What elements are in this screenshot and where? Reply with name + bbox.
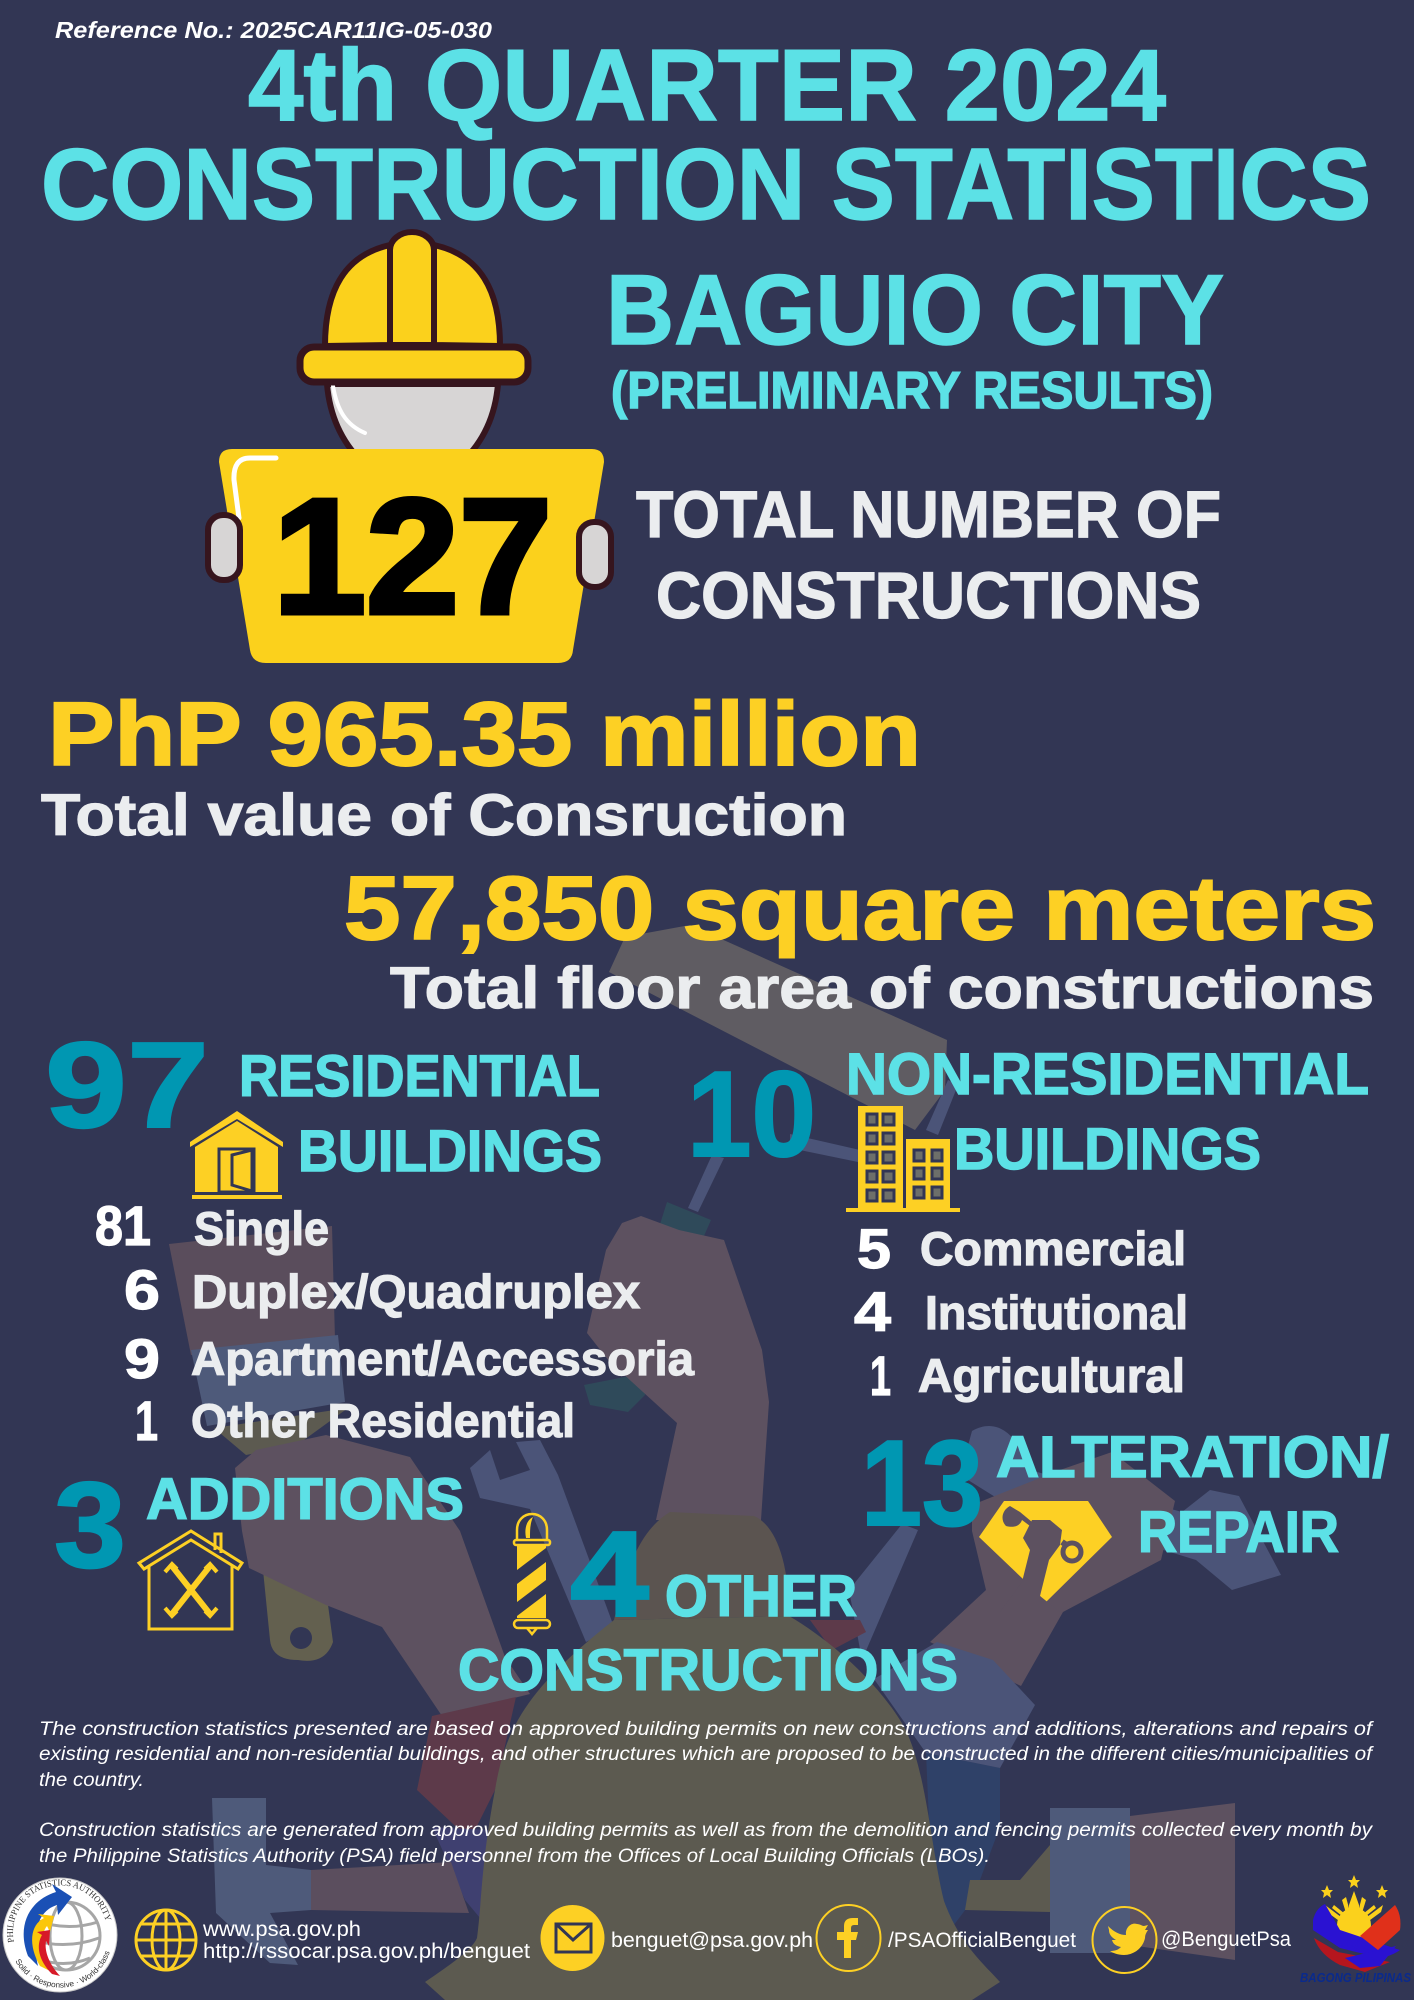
reference number: Reference No.: 2025CAR11IG-05-030 <box>55 17 492 43</box>
contact: email: benguet@psa.gov.ph <box>611 1929 813 1952</box>
list: residential breakdown: 6 <box>124 1258 160 1321</box>
list: residential breakdown: 1 <box>135 1389 158 1452</box>
panel: other constructions <box>458 1506 958 1703</box>
text block: methodology notes: existing residential and non-residential buildings, and other structures which are proposed to be constructed in the different cities/municipalities of <box>39 1744 1374 1765</box>
text block: methodology notes: the country. <box>39 1770 144 1791</box>
contact: websites <box>136 1910 530 1970</box>
text block: methodology notes: Construction statistics are generated from approved building permits as well as from the demolition and fencing permits collected every month by <box>39 1820 1374 1841</box>
title: 4th QUARTER 2024 <box>248 30 1166 142</box>
list: non-residential breakdown: Agricultural <box>918 1349 1185 1402</box>
panel: residential buildings: BUILDINGS <box>298 1119 602 1184</box>
icon: house <box>190 1111 283 1199</box>
panel: residential buildings <box>45 1017 695 1452</box>
heading: Baguio City <box>606 254 1224 420</box>
contact: websites: http://rssocar.psa.gov.ph/benguet <box>203 1940 530 1963</box>
stat label: total number of constructions <box>636 477 1221 632</box>
contact: twitter <box>1092 1907 1291 1973</box>
icon: house with crossed wrenches <box>139 1531 242 1629</box>
text block: methodology notes <box>39 1719 1374 1867</box>
icon: worker with helmet holding sign: 127 <box>273 465 552 648</box>
text block: methodology notes: The construction statistics presented are based on approved building permits on new constructions and additions, alterations and repairs of <box>39 1719 1374 1740</box>
stat: floor area: Total floor area of constructions <box>390 956 1374 1021</box>
list: residential breakdown: Duplex/Quadruplex <box>192 1265 640 1318</box>
text block: methodology notes: the Philippine Statistics Authority (PSA) field personnel from the Offices of Local Building Officials (LBOs). <box>39 1846 990 1867</box>
list: residential breakdown: 9 <box>124 1327 160 1390</box>
contact: twitter: @BenguetPsa <box>1161 1928 1291 1951</box>
stat: total value: PhP 965.35 million <box>48 685 921 785</box>
icon: facebook <box>816 1905 880 1971</box>
panel: additions: 3 <box>54 1457 126 1593</box>
logo: Philippine Statistics Authority <box>2 1878 118 1992</box>
contact: facebook <box>816 1905 1076 1971</box>
list: residential breakdown: Apartment/Accessoria <box>191 1332 695 1385</box>
panel: non-residential buildings: NON-RESIDENTIAL <box>846 1042 1369 1107</box>
icon: worker with helmet holding sign <box>208 232 611 663</box>
panel: alteration and repair: 13 <box>861 1415 983 1551</box>
panel: alteration and repair: ALTERATION/ <box>996 1425 1389 1490</box>
list: non-residential breakdown: 1 <box>870 1344 891 1407</box>
icon: envelope <box>540 1905 604 1971</box>
list: residential breakdown: Other Residential <box>191 1394 575 1447</box>
panel: non-residential buildings: BUILDINGS <box>954 1117 1261 1182</box>
stat label: total number of constructions: CONSTRUCTIONS <box>656 558 1201 632</box>
heading: Baguio City: (PRELIMINARY RESULTS) <box>611 362 1213 420</box>
panel: non-residential buildings: 10 <box>687 1046 816 1182</box>
panel: additions <box>54 1457 464 1629</box>
list: non-residential breakdown: Commercial <box>920 1222 1186 1275</box>
list: residential breakdown: Single <box>194 1202 329 1255</box>
panel: residential buildings: RESIDENTIAL <box>239 1044 600 1109</box>
logo: Bagong Pilipinas <box>1300 1875 1411 1985</box>
panel: additions: ADDITIONS <box>146 1467 464 1532</box>
stat: total value <box>41 685 921 848</box>
list: non-residential breakdown: Institutional <box>925 1286 1188 1339</box>
background illustration: raised fists holding tools <box>169 925 1281 2000</box>
list: residential breakdown: 81 <box>95 1194 151 1257</box>
panel: non-residential buildings <box>687 1042 1369 1407</box>
logo: Philippine Statistics Authority: Solid · Responsive · World-class <box>16 1951 110 1988</box>
logo: Philippine Statistics Authority: PHILIPPINE STATISTICS AUTHORITY <box>7 1879 112 1943</box>
heading: Baguio City: BAGUIO CITY <box>606 254 1224 365</box>
stat: floor area: 57,850 square meters <box>344 859 1376 959</box>
panel: alteration and repair <box>861 1415 1389 1612</box>
icon: barber pole <box>514 1514 550 1634</box>
list: non-residential breakdown: 5 <box>857 1217 891 1280</box>
panel: residential buildings: 97 <box>45 1017 209 1153</box>
stat label: total number of constructions: TOTAL NUMBER OF <box>636 477 1221 551</box>
icon: office buildings <box>846 1106 960 1212</box>
icon: twitter bird <box>1092 1907 1156 1973</box>
stat: floor area <box>344 859 1376 1021</box>
icon: globe <box>136 1910 196 1970</box>
contact: facebook: /PSAOfficialBenguet <box>888 1929 1076 1952</box>
contact: websites: www.psa.gov.ph <box>202 1918 361 1941</box>
list: non-residential breakdown <box>854 1217 1188 1407</box>
panel: other constructions: OTHER <box>665 1564 857 1629</box>
list: non-residential breakdown: 4 <box>854 1280 891 1343</box>
panel: other constructions: 4 <box>570 1506 649 1642</box>
stat: total value: Total value of Consruction <box>41 783 847 848</box>
icon: gem with fist and wrench <box>979 1501 1112 1612</box>
title <box>41 30 1371 241</box>
panel: alteration and repair: REPAIR <box>1138 1500 1339 1565</box>
panel: other constructions: CONSTRUCTIONS <box>458 1638 958 1703</box>
list: residential breakdown <box>95 1194 695 1452</box>
contact: email <box>540 1905 813 1971</box>
